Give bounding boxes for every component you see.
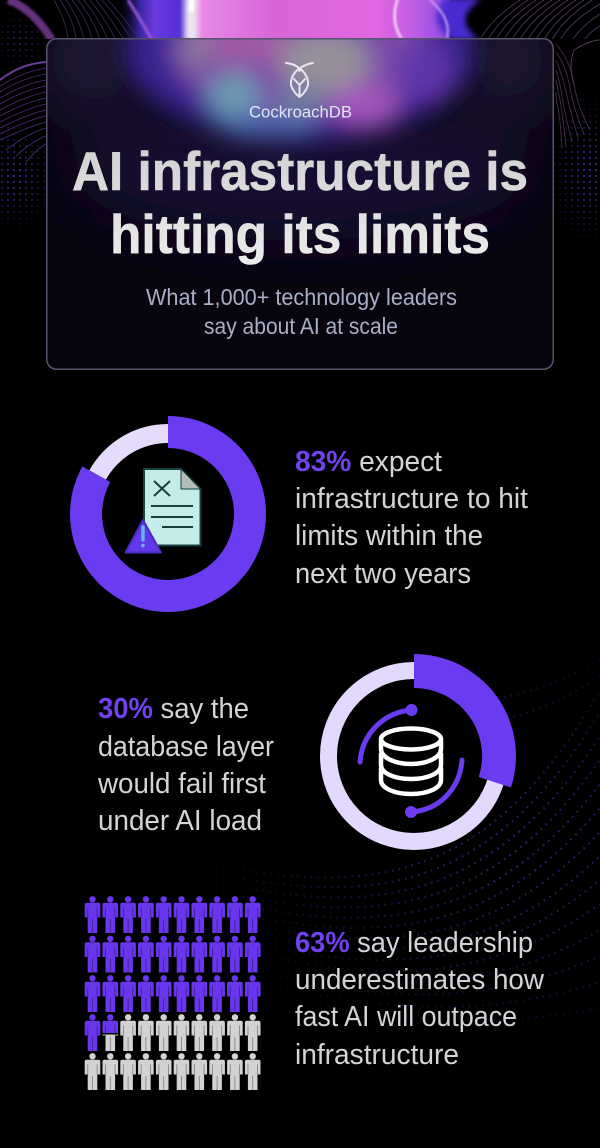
- stat text: 83%: limits within the: [295, 520, 483, 552]
- stat text: 83%: next two years: [295, 558, 471, 590]
- stat text: 63%: 63% say leadership: [295, 927, 533, 959]
- stat text: 63%: [295, 927, 545, 1071]
- left side wave lines: [0, 62, 46, 162]
- stat text: 83%: [295, 446, 528, 590]
- stat text: 30%: database layer: [98, 731, 274, 763]
- donut chart: 83 percent: [70, 416, 266, 612]
- stat text: 63%: infrastructure: [295, 1039, 459, 1071]
- pictogram: 100 people, 63 highlighted: [85, 896, 260, 1090]
- stat text: 30%: would fail first: [97, 768, 266, 800]
- header card: [46, 38, 554, 370]
- dotted wave field, lower section: [150, 660, 600, 1021]
- subtitle: say about AI at scale: [204, 313, 398, 339]
- top-left band: [8, 0, 52, 40]
- title: hitting its limits: [110, 203, 490, 265]
- top-right wave lines: [480, 0, 600, 40]
- stat text: 30%: 30% say the: [98, 693, 249, 725]
- stat text: 30%: [97, 693, 274, 837]
- icon: sync arcs: [360, 706, 462, 816]
- stat text: 63%: underestimates how: [295, 964, 545, 996]
- title: [72, 140, 528, 265]
- panel: 83% stat: [70, 416, 528, 612]
- icon: document with warning: [126, 469, 200, 552]
- right side wave lines: [556, 40, 600, 148]
- panel: 30% stat: [97, 654, 516, 842]
- panel: 63% stat: [85, 896, 545, 1090]
- icon: database: [381, 728, 441, 794]
- stat text: 83%: 83% expect: [295, 446, 442, 478]
- title: AI infrastructure is: [72, 140, 528, 202]
- brand name: CockroachDB: [249, 102, 352, 122]
- stat text: 30%: under AI load: [98, 805, 262, 837]
- stat text: 83%: infrastructure to hit: [295, 483, 528, 515]
- subtitle: [146, 284, 457, 339]
- subtitle: What 1,000+ technology leaders: [146, 284, 457, 310]
- stat text: 63%: fast AI will outpace: [295, 1001, 517, 1033]
- icon: CockroachDB logo: [286, 63, 313, 97]
- donut chart: 30 percent: [328, 654, 516, 842]
